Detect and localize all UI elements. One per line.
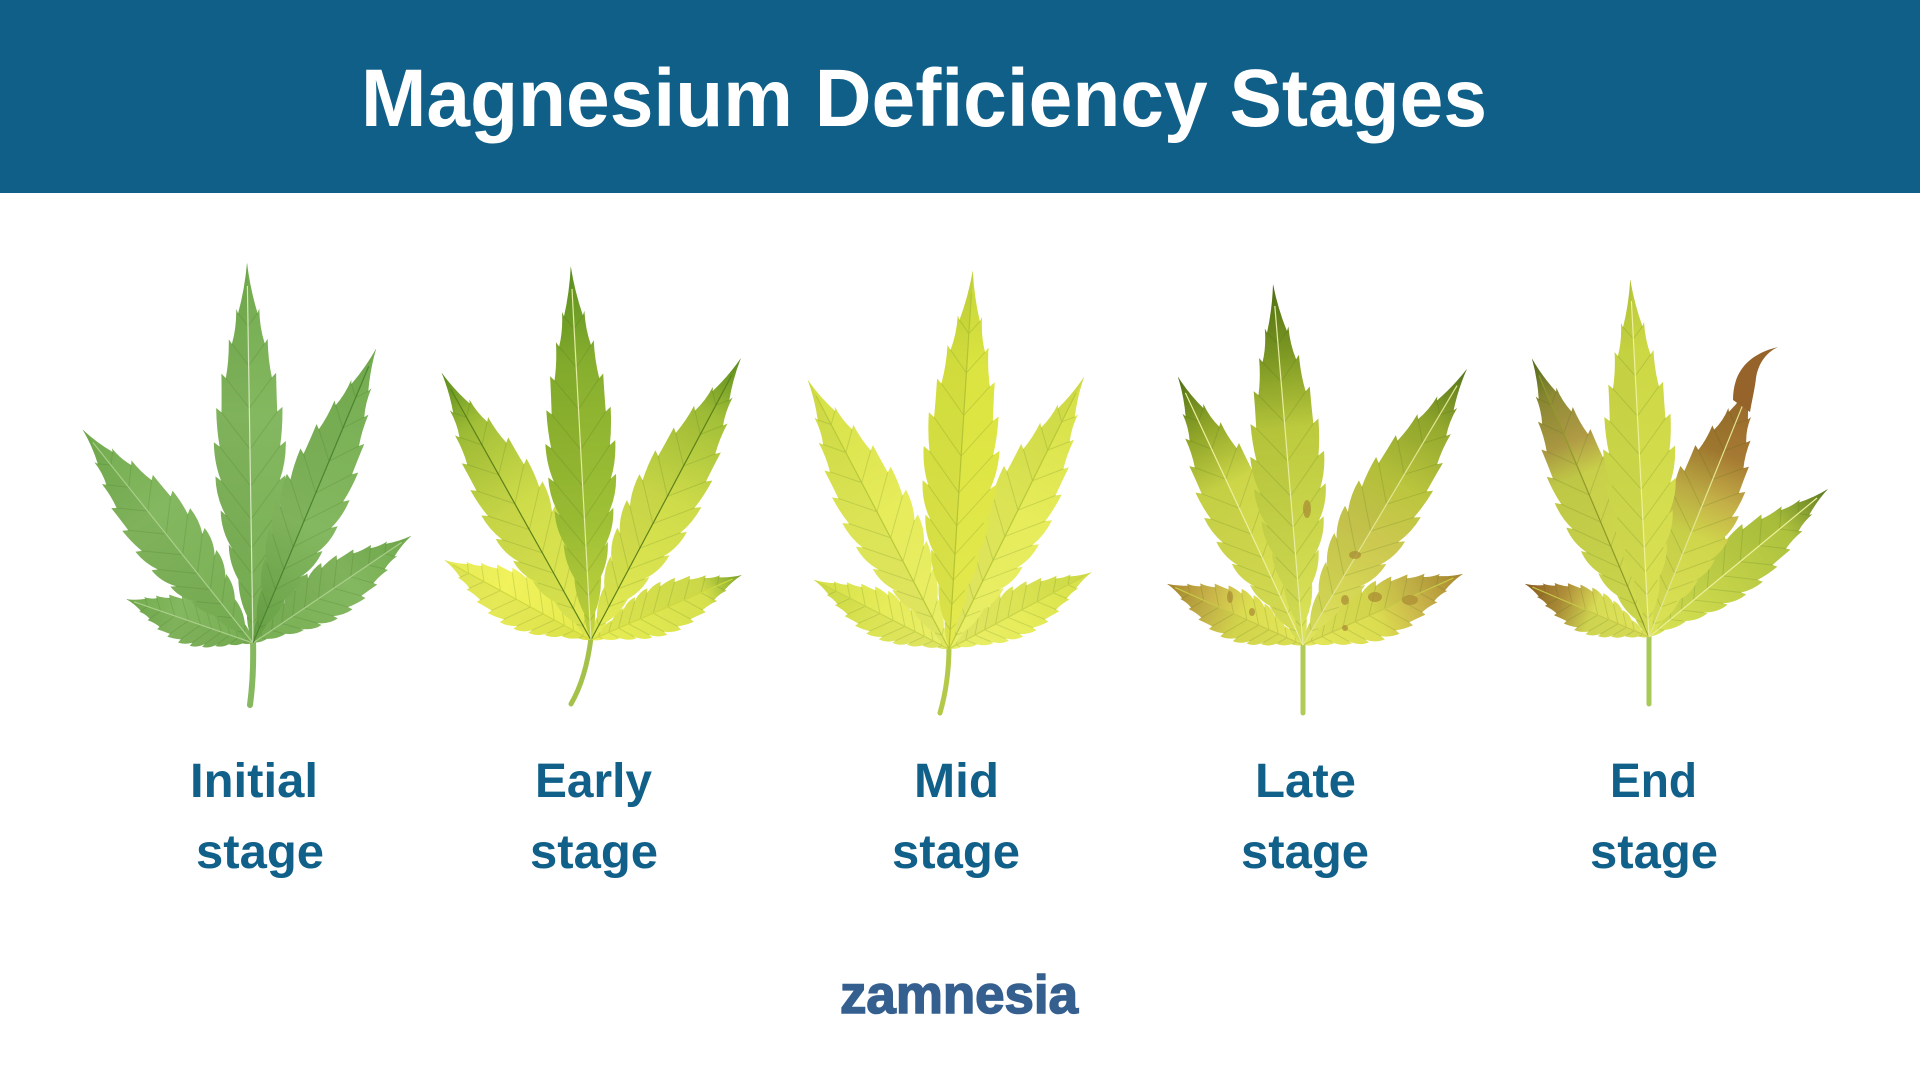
leaflet: left [1145,362,1336,660]
label: end stage: End [1610,755,1697,808]
stem [1646,634,1652,704]
label: end stage [1590,755,1718,879]
leaflet: center [1594,278,1685,639]
stem [1300,642,1306,713]
leaflet: left [411,356,622,657]
leaflet: lower left [119,576,261,666]
label: mid stage: stage [892,826,1020,879]
leaflet: lower right [237,513,427,666]
header banner [0,0,1920,193]
leaf: late stage [1145,281,1498,713]
leaflet: right [1272,351,1498,663]
stem [250,640,253,705]
stem [571,638,591,704]
leaflet: upper right [222,336,407,656]
label: mid stage: Mid [914,755,999,808]
title: Magnesium Deficiency Stages [361,53,1487,144]
leaflet: center [911,268,1011,651]
leaf: initial stage [55,262,427,705]
curled brown tip [1733,347,1778,412]
leaflet: center [1236,281,1340,648]
label: late stage: Late [1255,755,1356,808]
leaflet: lower right [1630,466,1847,660]
leaf: early stage [411,265,772,704]
leaflet: lower left [803,558,960,670]
leaf: end stage [1500,278,1847,704]
label: early stage [530,755,658,879]
leaflet: left [1500,345,1681,651]
leaflet: lower right [1291,547,1475,671]
label: late stage [1241,755,1369,879]
leaf: mid stage [776,268,1116,713]
label: initial stage: stage [196,826,324,879]
brown spots [1227,500,1418,631]
label: late stage: stage [1241,826,1369,879]
label: early stage: stage [530,826,658,879]
leaflet: left [55,408,280,665]
leaflet: right [918,361,1116,665]
label: initial stage: Initial [190,755,318,808]
label: end stage: stage [1590,826,1718,879]
leaflet: right [560,342,772,656]
label: initial stage [190,755,324,879]
leaflet: center [211,262,289,644]
leaflet: lower right [937,550,1103,671]
stem [940,646,949,713]
leaflet: lower left [431,535,604,665]
leaflet: lower right [581,551,752,664]
leaflet: center [536,265,626,642]
leaflet: right [1614,368,1787,651]
label: early stage: Early [535,755,652,808]
leaflet: left [776,363,981,666]
leaflet: lower left [1156,560,1314,669]
label: mid stage [892,755,1020,879]
leaflet: lower left [1516,563,1658,658]
logo: zamnesia: zamnesia [840,965,1079,1025]
